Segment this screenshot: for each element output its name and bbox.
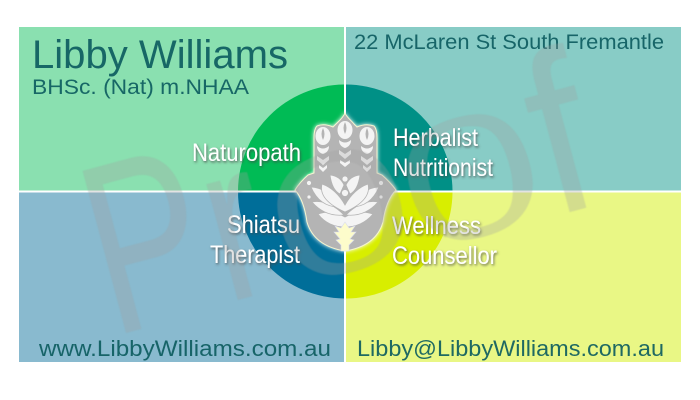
panel: bottom right [346,192,681,362]
qualifications: BHSc. (Nat) m.NHAA [32,76,249,99]
address: 22 McLaren St South Fremantle [354,31,664,54]
name heading: Libby Williams [32,33,288,77]
watermark: Proof: o [360,15,571,304]
lotus flower [306,175,384,227]
finger ornaments [316,121,374,172]
watermark: Proof: r [173,89,294,350]
hamsa body [295,113,396,251]
tree motif [334,222,356,251]
watermark: Proof: f [499,3,619,264]
email: Libby@LibbyWilliams.com.au [357,336,664,361]
watermark: Proof [55,3,619,387]
panel: top left [19,27,344,190]
label: Therapist: Therapist [210,241,300,269]
label: Naturopath: Naturopath [192,139,301,167]
label: Nutritionist: Nutritionist [393,154,493,182]
label: Herbalist: Herbalist [393,124,478,152]
icon: hamsa hand with lotus [295,113,396,251]
label: Counsellor: Counsellor [392,242,497,270]
panel: bottom left [19,192,344,362]
watermark: Proof: o [230,50,441,339]
label: Wellness: Wellness [392,212,481,240]
label: Shiatsu: Shiatsu [227,211,300,239]
website: www.LibbyWilliams.com.au [38,336,331,361]
circle: four coloured quadrants [238,84,452,298]
watermark: Proof: P [55,93,236,387]
panel: top right [346,27,681,190]
